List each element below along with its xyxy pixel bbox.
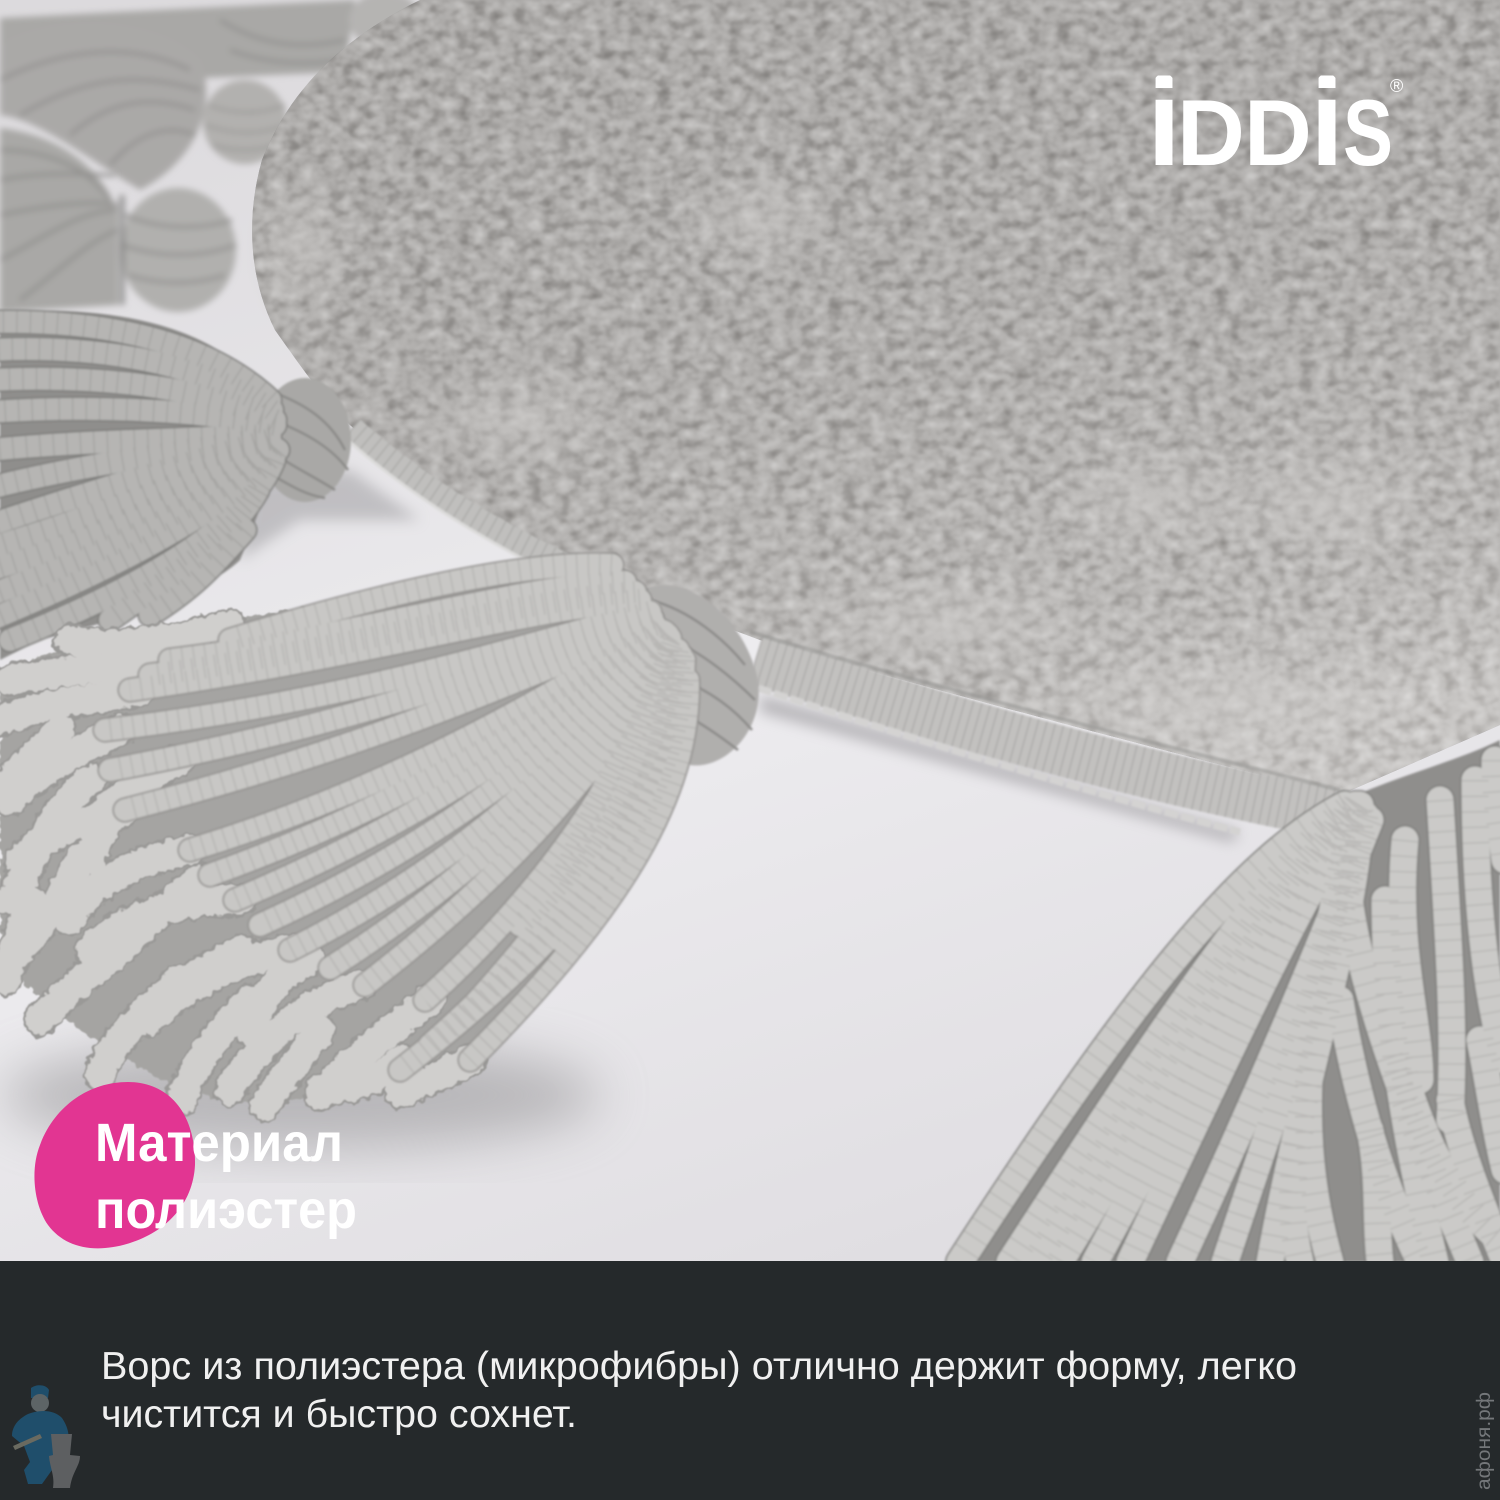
logo: iDDiS: D — [1244, 80, 1312, 185]
bead of large tassel — [640, 586, 759, 765]
watermark: афоня.рф — [1474, 1392, 1495, 1490]
caption text: Ворс из полиэстера (микрофибры) отлично держит форму, легко — [101, 1345, 1297, 1388]
rug edge shadow — [760, 695, 1240, 842]
rug body — [245, 0, 1500, 795]
logo: iDDiS: i — [1147, 55, 1181, 192]
heading: material: Материал — [95, 1113, 343, 1173]
rug stitched rim — [350, 428, 1340, 832]
dark caption panel — [0, 1261, 1500, 1500]
top tassel beads — [203, 80, 287, 164]
twisted cords — [105, 565, 688, 1070]
tassel shadow on floor — [0, 1040, 600, 1150]
large tassel body — [0, 560, 691, 1105]
top tassel, out of focus — [0, 0, 421, 190]
head shadow on floor — [240, 470, 420, 560]
heading: material: полиэстер — [95, 1180, 357, 1240]
bead of middle tassel — [259, 378, 351, 502]
logo: iDDiS: D — [1177, 80, 1245, 185]
caption text — [101, 1345, 1297, 1436]
middle tassel — [0, 310, 278, 660]
logo: iDDiS: ® — [1390, 76, 1403, 96]
bottom-right tassel — [945, 740, 1500, 1262]
rug light patches — [670, 160, 850, 280]
heading: material — [95, 1113, 357, 1240]
caption text: чистится и быстро сохнет. — [101, 1393, 577, 1436]
icon: plumber mascot with toilet — [12, 1385, 80, 1488]
logo: iDDiS: S — [1343, 80, 1393, 185]
pink blob accent — [34, 1082, 195, 1248]
fluffy strand ends — [0, 625, 470, 1105]
large tassel — [0, 560, 691, 1105]
second tassel, out of focus — [0, 128, 236, 312]
logo: iDDiS: i — [1310, 55, 1344, 192]
logo: iDDiS — [1156, 76, 1403, 166]
